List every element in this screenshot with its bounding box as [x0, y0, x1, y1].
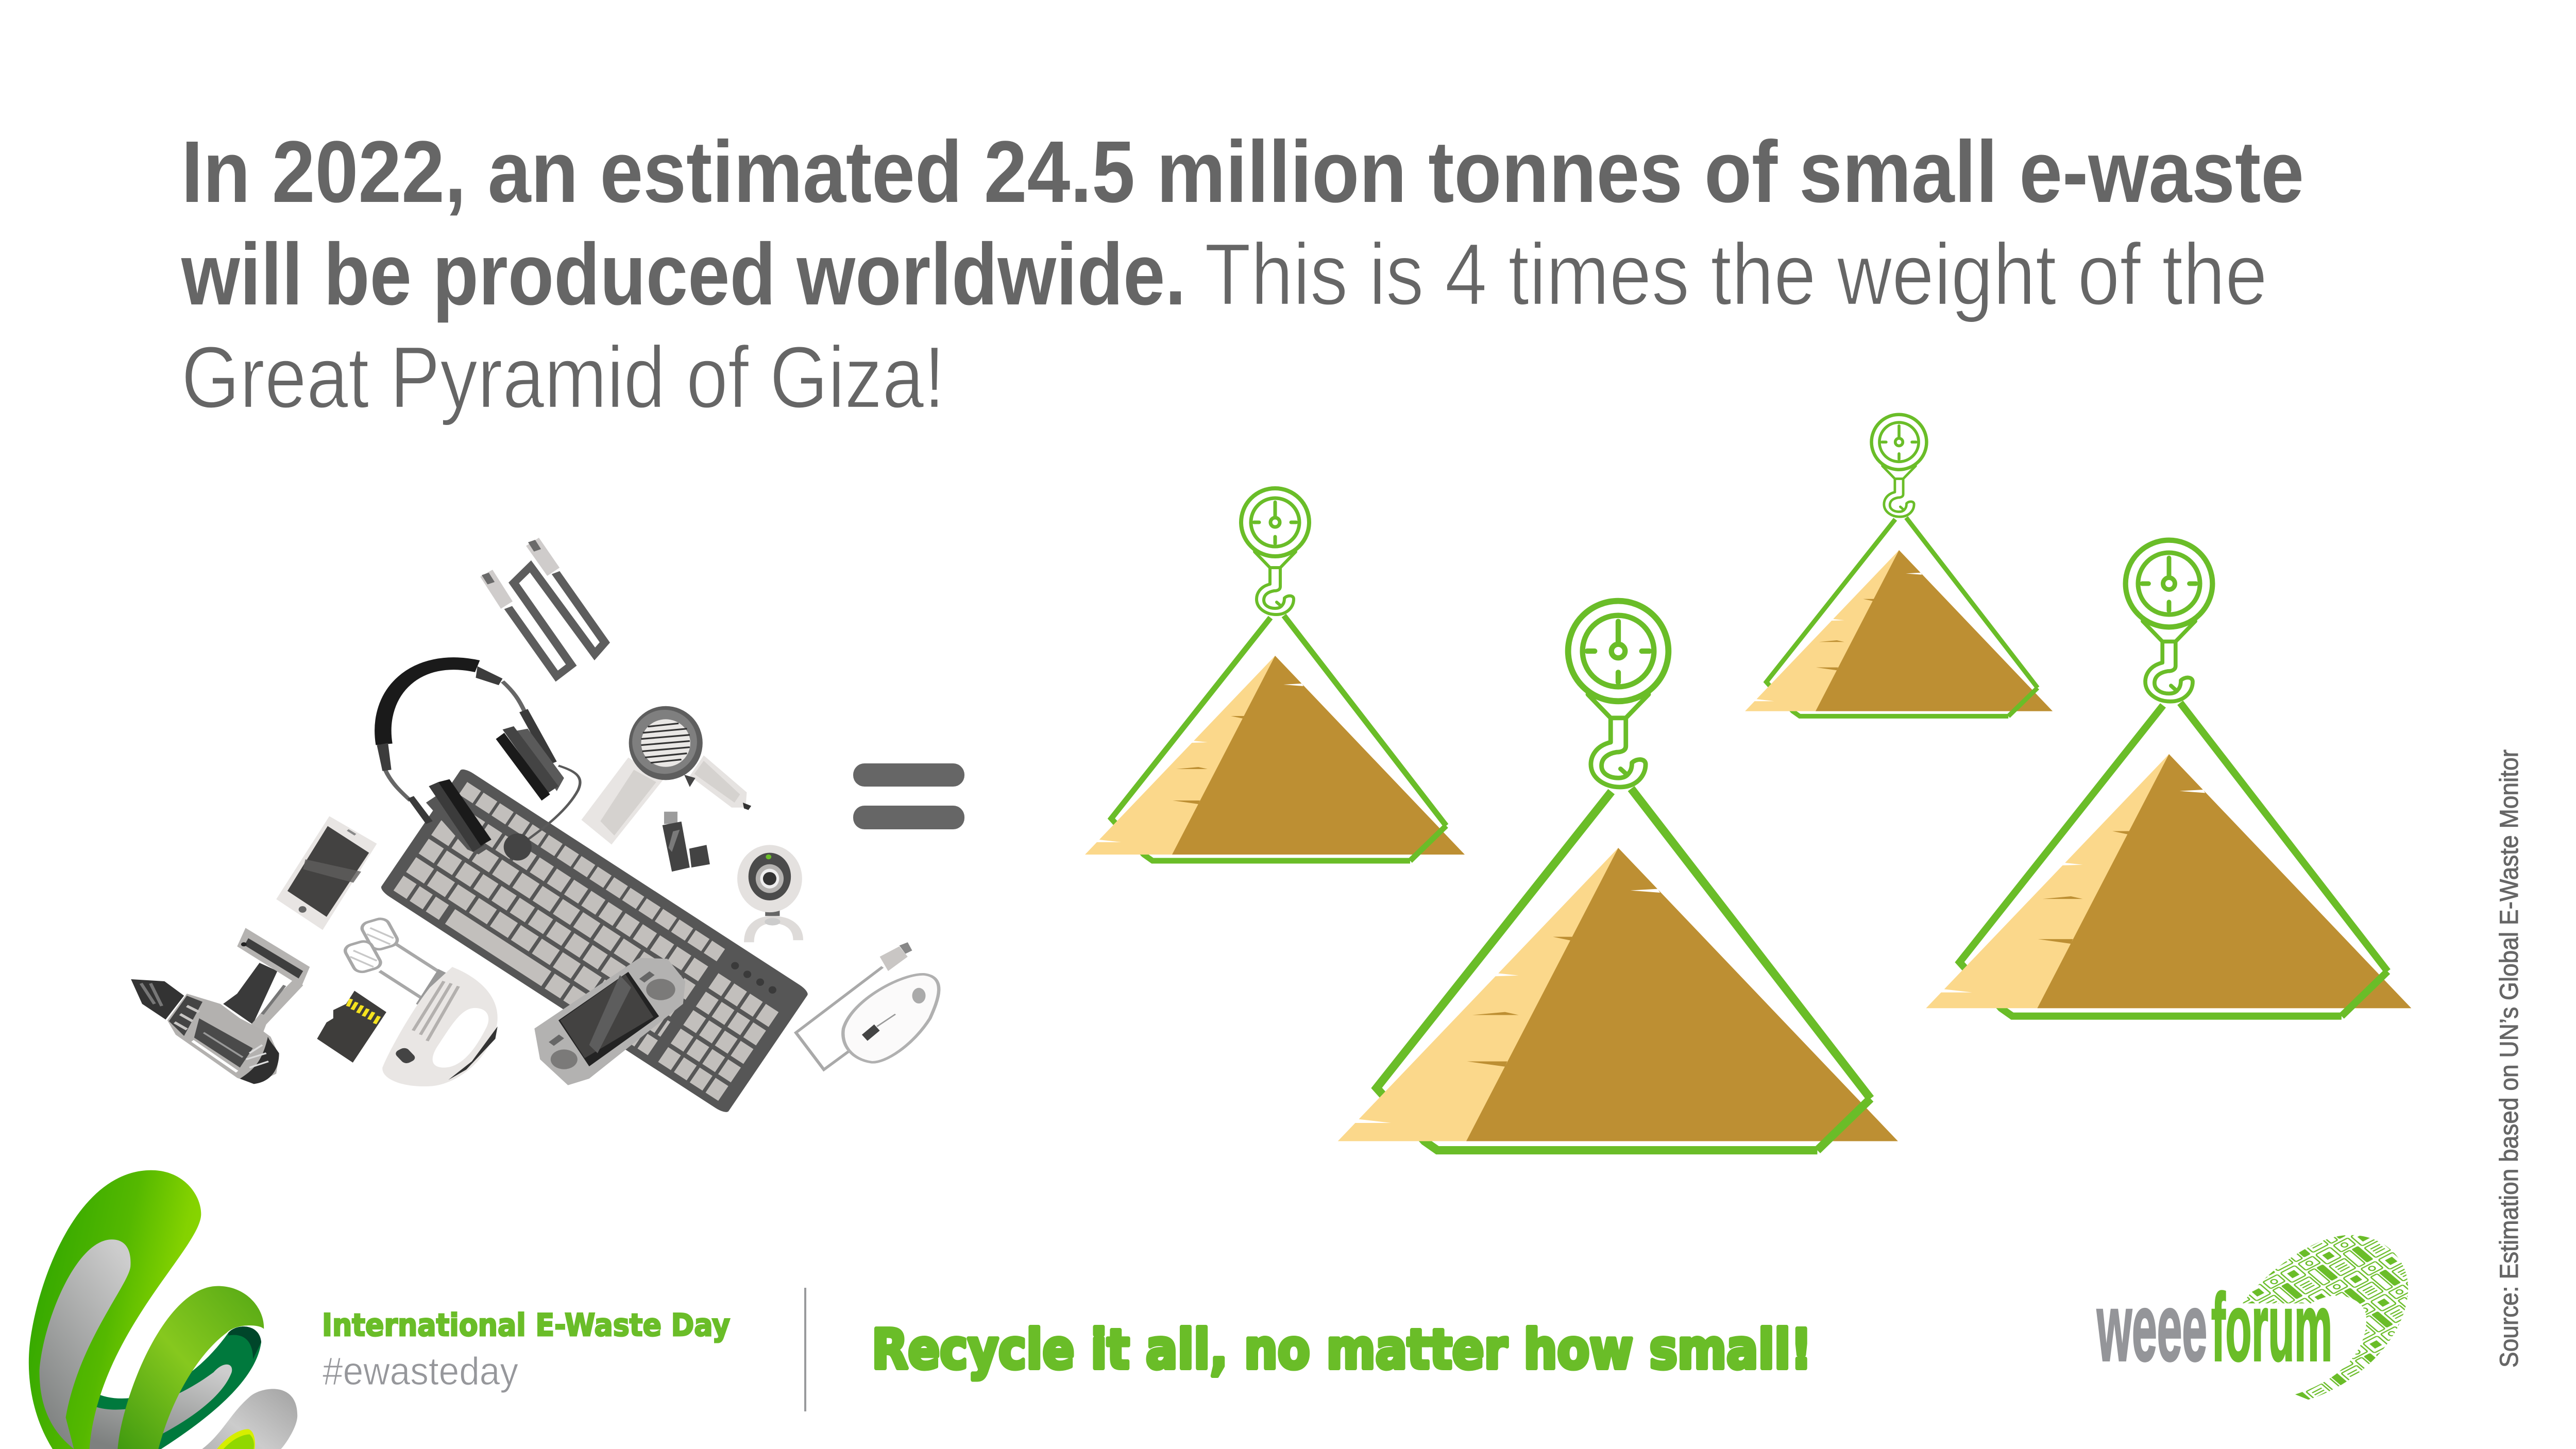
title: headline text: This is 4 times the weight of the: [1205, 226, 2267, 323]
icon: webcam: [737, 845, 802, 942]
title: headline text: Great Pyramid of Giza!: [181, 329, 945, 427]
title: headline text: In 2022, an estimated 24.5 million tonnes of small e-waste: [181, 123, 2304, 221]
icon: pyramid on scale 3: [1745, 415, 2053, 716]
logo: WEEE Forum: forum: [2211, 1274, 2332, 1381]
icon: keyboard: [379, 766, 810, 1115]
slogan: Recycle it all, no matter how small!: [872, 1318, 1812, 1381]
hashtag: #ewasteday: [323, 1350, 518, 1393]
icon: mouse with cable: [796, 942, 939, 1069]
icon: smartphone: [276, 816, 377, 930]
icon: pyramid on scale 4: [1926, 540, 2411, 1016]
logo: International E-Waste Day swirl: [29, 1170, 297, 1449]
event name: International E-Waste Day: [322, 1307, 730, 1343]
icon: pyramid on scale 2: [1338, 601, 1898, 1150]
icon: equals sign: [853, 763, 964, 829]
icon: cordless drill: [131, 928, 310, 1084]
icon: USB stick: [663, 812, 710, 872]
icon: SD card: [317, 991, 386, 1063]
icon: ethernet cable: [480, 538, 605, 676]
divider: [804, 1288, 806, 1411]
icon: hand mixer: [343, 917, 498, 1086]
title: headline text: [181, 123, 2304, 427]
logo: WEEE Forum: [2097, 1235, 2408, 1400]
icon: pyramid on scale 1: [1085, 488, 1465, 861]
source note: Source: Estimation based on UN’s Global E-Waste Monitor: [2495, 749, 2523, 1368]
title: headline text: will be produced worldwide.: [181, 226, 1186, 323]
logo swoosh of device icons: [2243, 1235, 2408, 1400]
illustration: small electronic devices: [131, 538, 939, 1115]
icon: hair dryer: [581, 706, 751, 845]
logo: WEEE Forum: weee: [2097, 1274, 2207, 1381]
icon: game console: [534, 958, 685, 1085]
icon: headphones: [377, 663, 580, 861]
